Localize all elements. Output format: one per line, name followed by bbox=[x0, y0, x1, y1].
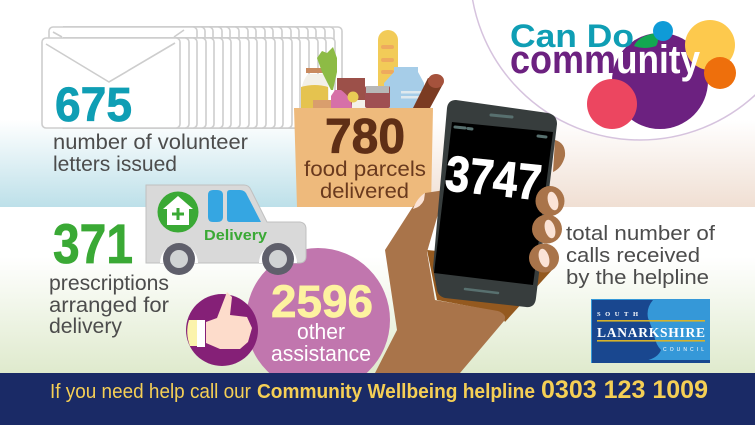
number: 2596: 2596 bbox=[271, 276, 373, 327]
label: parcels: food parcels bbox=[304, 158, 426, 181]
label: prescriptions: delivery bbox=[49, 315, 122, 338]
fingers bbox=[529, 186, 564, 272]
icon: delivery van: Delivery bbox=[204, 227, 268, 244]
label: calls received: by the helpline bbox=[566, 267, 709, 289]
phone bbox=[433, 100, 557, 307]
logo: South Lanarkshire Council: LANARKSHIRE bbox=[597, 325, 705, 340]
hand shadow bbox=[427, 250, 552, 322]
footer banner: If you need help call our bbox=[50, 381, 251, 403]
footer banner: Community Wellbeing helpline bbox=[257, 381, 535, 403]
logo: South Lanarkshire Council: SOUTH bbox=[597, 311, 638, 318]
icon: delivery van bbox=[146, 185, 306, 275]
label: other assistance: assistance bbox=[271, 341, 371, 366]
label: calls received: calls received bbox=[566, 245, 700, 267]
panel: pink assistance circle bbox=[248, 248, 390, 373]
panel: other assistance bbox=[186, 276, 373, 366]
panel: food parcels bbox=[294, 30, 444, 207]
label: prescriptions: prescriptions bbox=[49, 272, 169, 295]
number: 371: 371 bbox=[53, 212, 133, 275]
logo: Can Do Community: unity bbox=[616, 38, 701, 82]
box bbox=[294, 108, 433, 207]
footer banner: 0303 123 1009 bbox=[541, 376, 708, 404]
icon: groceries bbox=[301, 30, 444, 110]
icon: thumbs up bbox=[186, 292, 258, 366]
icon: envelope stack bbox=[42, 27, 342, 128]
footer banner bbox=[0, 373, 755, 425]
label: letters: number of volunteer bbox=[53, 130, 248, 154]
label: calls received: total number of bbox=[566, 223, 715, 245]
logo circle background bbox=[470, 0, 755, 140]
icon: hand and phone bbox=[375, 100, 565, 373]
logo: Can Do Community: comm bbox=[510, 38, 616, 82]
panel: prescriptions bbox=[49, 185, 306, 338]
hand bbox=[375, 190, 505, 373]
number: 3747: 3747 bbox=[443, 145, 544, 211]
logo: South Lanarkshire Council bbox=[591, 299, 710, 363]
panel: volunteer letters bbox=[42, 27, 342, 176]
logo: South Lanarkshire Council: COUNCIL bbox=[663, 347, 704, 353]
logo: Can Do Community bbox=[510, 18, 736, 129]
number: 780: 780 bbox=[325, 110, 405, 164]
label: parcels: delivered bbox=[320, 180, 409, 203]
label: prescriptions: arranged for bbox=[49, 294, 169, 317]
label: other assistance: other bbox=[297, 319, 345, 344]
number: 675: 675 bbox=[55, 79, 132, 132]
label: letters: letters issued bbox=[53, 152, 177, 176]
logo: Can Do Community: Can Do bbox=[510, 18, 634, 54]
